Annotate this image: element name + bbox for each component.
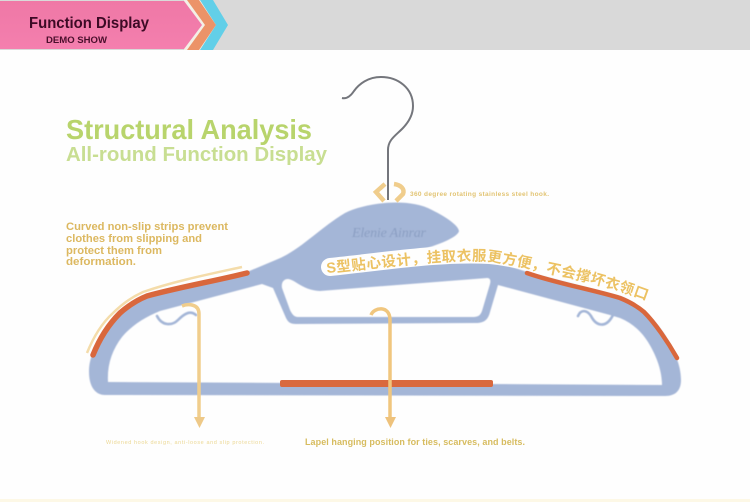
hanger [89, 203, 681, 396]
callout: non-slip strips: clothes from slipping and [66, 233, 202, 245]
title line 2: All-round Function Display [66, 143, 328, 166]
left small hook [157, 313, 196, 324]
callout: non-slip strips: protect them from [66, 245, 162, 257]
title line 1: Structural Analysis [66, 114, 312, 145]
steel hook [342, 77, 413, 200]
bottom non-slip strip [280, 380, 493, 387]
main title [66, 114, 328, 166]
middle arrow [371, 309, 396, 428]
right non-slip strip [527, 273, 677, 358]
header subtitle: DEMO SHOW [46, 35, 108, 45]
callout: steel hook: 360 degree rotating stainless steel hook. [410, 191, 549, 198]
header title: Function Display [29, 15, 149, 32]
right small hook [578, 311, 613, 325]
callout: anti-slip: Widened hook design, anti-loose and slip protection. [106, 440, 264, 446]
rotation arrows icon [376, 184, 404, 201]
left non-slip strip [93, 273, 247, 355]
left arrow [182, 305, 205, 428]
header banner [0, 0, 750, 50]
yellow guide line along left strip [87, 267, 242, 353]
logo script: Elenie Ainrar [351, 226, 427, 241]
chinese caption text: S型贴心设计，挂取衣服更方便，不会撑坏衣领口 [327, 248, 649, 301]
chevron: blue [200, 0, 228, 50]
chinese caption band [321, 247, 649, 301]
callout: non-slip strips: Curved non-slip strips prevent [66, 221, 228, 233]
callout: lapel hanging: Lapel hanging position for ties, scarves, and belts. [305, 437, 525, 447]
chevron: orange [187, 0, 216, 50]
callout: non-slip strips: deformation. [66, 256, 136, 268]
pink ribbon [0, 1, 202, 49]
callout: non-slip strips [66, 221, 228, 268]
hanger body [89, 203, 681, 396]
